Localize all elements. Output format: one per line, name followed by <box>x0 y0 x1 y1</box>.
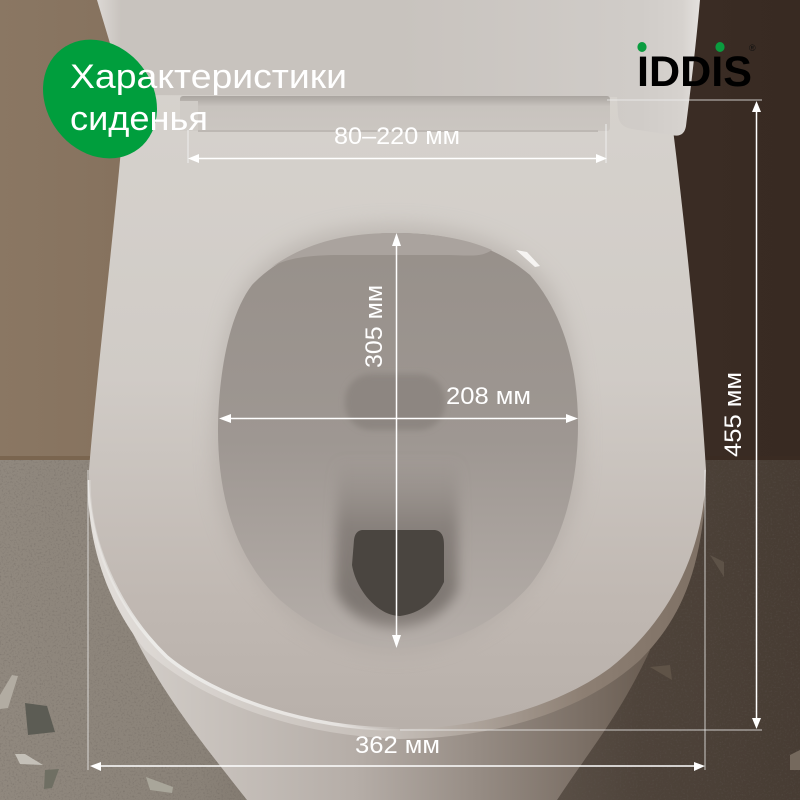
title: Характеристики <box>70 58 347 96</box>
dimension: seat width <box>88 470 705 771</box>
dimension: opening length: 305 мм <box>361 285 388 368</box>
background wall <box>0 0 800 460</box>
lid <box>97 0 700 136</box>
dimension: seat length <box>400 100 762 730</box>
dimension: hinge distance: 80–220 мм <box>334 123 460 150</box>
bowl drain <box>352 530 444 616</box>
bowl funnel <box>335 460 458 628</box>
seat left rim highlight <box>89 480 400 729</box>
title: сиденья <box>70 100 208 138</box>
hinge bar <box>180 96 610 132</box>
dimension: seat length: 455 мм <box>720 372 747 457</box>
dimension: opening length <box>361 233 401 648</box>
brand logo: IDDIS <box>637 48 752 96</box>
seat glint <box>516 250 540 267</box>
toilet body <box>118 600 650 800</box>
dimension: seat width: 362 мм <box>355 732 440 759</box>
dimension: opening width <box>219 383 578 423</box>
brand logo: ® <box>749 43 756 53</box>
background terrazzo floor <box>0 456 800 800</box>
seat lower lip <box>88 480 706 739</box>
bowl opening <box>218 233 578 648</box>
title <box>70 58 347 138</box>
water spreader recess <box>345 374 445 430</box>
dimension: hinge distance <box>188 123 607 163</box>
green title blob <box>19 17 181 181</box>
dimension: opening width: 208 мм <box>446 383 531 410</box>
shadow halo around opening <box>215 225 581 652</box>
bowl top shelf <box>270 233 492 268</box>
toilet seat <box>89 90 706 729</box>
